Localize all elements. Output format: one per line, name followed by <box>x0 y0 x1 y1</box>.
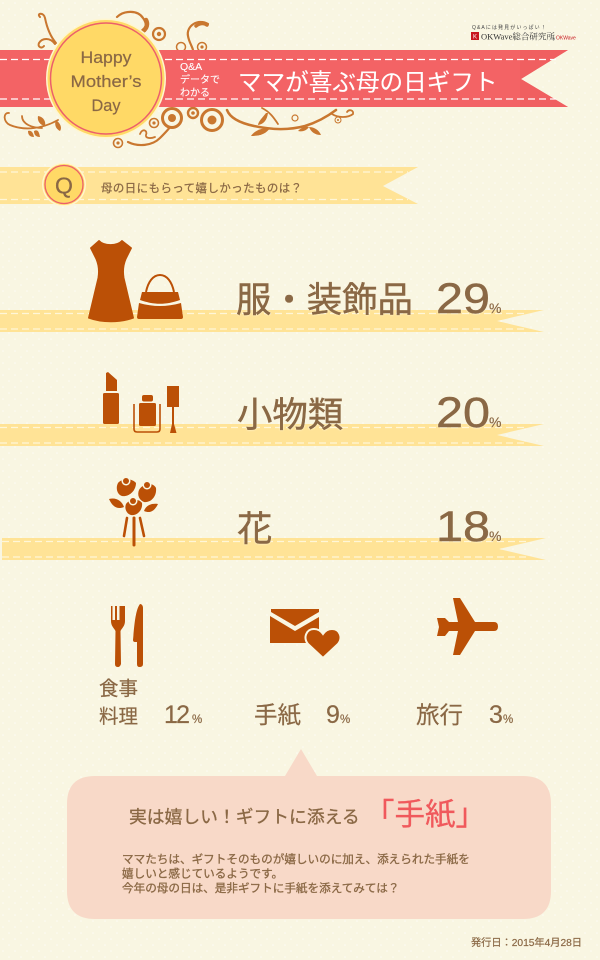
icon: envelope with heart <box>270 609 340 658</box>
value: % <box>503 714 513 726</box>
ribbon side caption: Q&A <box>180 61 202 73</box>
label: 服・装飾品 <box>236 280 413 320</box>
item: food <box>99 604 202 729</box>
value: 29 <box>436 275 490 323</box>
ribbon <box>2 538 546 560</box>
ornament: swirls behind header <box>5 12 353 148</box>
logo: OKWave research institute <box>471 24 576 42</box>
icon: dress <box>88 240 134 322</box>
label: 旅行 <box>416 702 463 728</box>
callout heading: 実は嬉しい！ギフトに添える <box>129 807 360 827</box>
question text: 母の日にもらって嬉しかったものは？ <box>101 181 303 195</box>
label: 小物類 <box>237 395 343 435</box>
icon: lipstick <box>103 372 119 424</box>
value: 18 <box>436 503 490 551</box>
icon: bouquet <box>109 476 158 545</box>
ribbon side caption: わかる <box>180 87 210 99</box>
title: ママが喜ぶ母の日ギフト <box>238 70 498 96</box>
callout body: 今年の母の日は、是非ギフトに手紙を添えてみては？ <box>122 881 399 895</box>
icon: perfume <box>134 395 160 432</box>
callout bubble <box>67 749 551 919</box>
header ribbon <box>0 50 568 107</box>
ribbon side caption <box>180 61 220 99</box>
value: % <box>192 714 202 726</box>
label: 手紙 <box>254 702 301 728</box>
icon: nail polish <box>167 386 179 433</box>
ribbon <box>0 424 544 446</box>
value: 9 <box>326 701 340 729</box>
value <box>326 701 350 729</box>
badge: Happy Mother's Day: Mother’s <box>70 72 142 91</box>
callout highlight: 「手紙」 <box>364 798 486 832</box>
callout <box>67 749 551 919</box>
item: travel <box>416 598 513 729</box>
value <box>489 701 513 729</box>
value: 12 <box>164 701 190 729</box>
value: % <box>489 414 501 430</box>
row: flowers <box>2 476 546 560</box>
icon: Q badge <box>42 162 86 206</box>
row: accessories <box>0 372 544 446</box>
badge: Happy Mother's Day: Happy <box>80 48 132 67</box>
value: % <box>340 714 350 726</box>
ribbon <box>0 310 544 332</box>
callout body: 嬉しいと感じているようです。 <box>122 866 283 880</box>
icon: Q badge: Q <box>55 172 73 198</box>
value: % <box>489 528 501 544</box>
logo: OKWave research institute: by <box>551 36 555 40</box>
badge: Happy Mother's Day: Day <box>92 96 121 115</box>
label: 花 <box>237 509 272 549</box>
callout body <box>122 852 470 895</box>
logo: OKWave research institute: OKWave <box>556 36 576 42</box>
logo: OKWave research institute: Q&Aには発見がいっぱい！ <box>472 24 547 31</box>
publication date: 発行日：2015年4月28日 <box>471 936 582 949</box>
question ribbon <box>0 162 418 206</box>
icon: fork and knife <box>111 604 143 667</box>
logo: OKWave research institute: K <box>473 34 477 40</box>
value: 3 <box>489 701 503 729</box>
label <box>99 678 138 728</box>
icon: airplane <box>437 598 498 655</box>
badge: Happy Mother's Day <box>46 18 166 138</box>
logo: OKWave research institute: OKWave総合研究所 <box>481 32 555 42</box>
callout body: ママたちは、ギフトそのものが嬉しいのに加え、添えられた手紙を <box>122 852 470 866</box>
item: letter <box>254 609 350 729</box>
icon: handbag <box>137 275 183 319</box>
label: 料理 <box>99 706 138 728</box>
value: 20 <box>436 389 490 437</box>
label: 食事 <box>99 678 138 700</box>
ribbon side caption: データで <box>180 73 220 86</box>
value: % <box>489 300 501 316</box>
row: clothing <box>0 240 544 332</box>
value <box>164 701 202 729</box>
